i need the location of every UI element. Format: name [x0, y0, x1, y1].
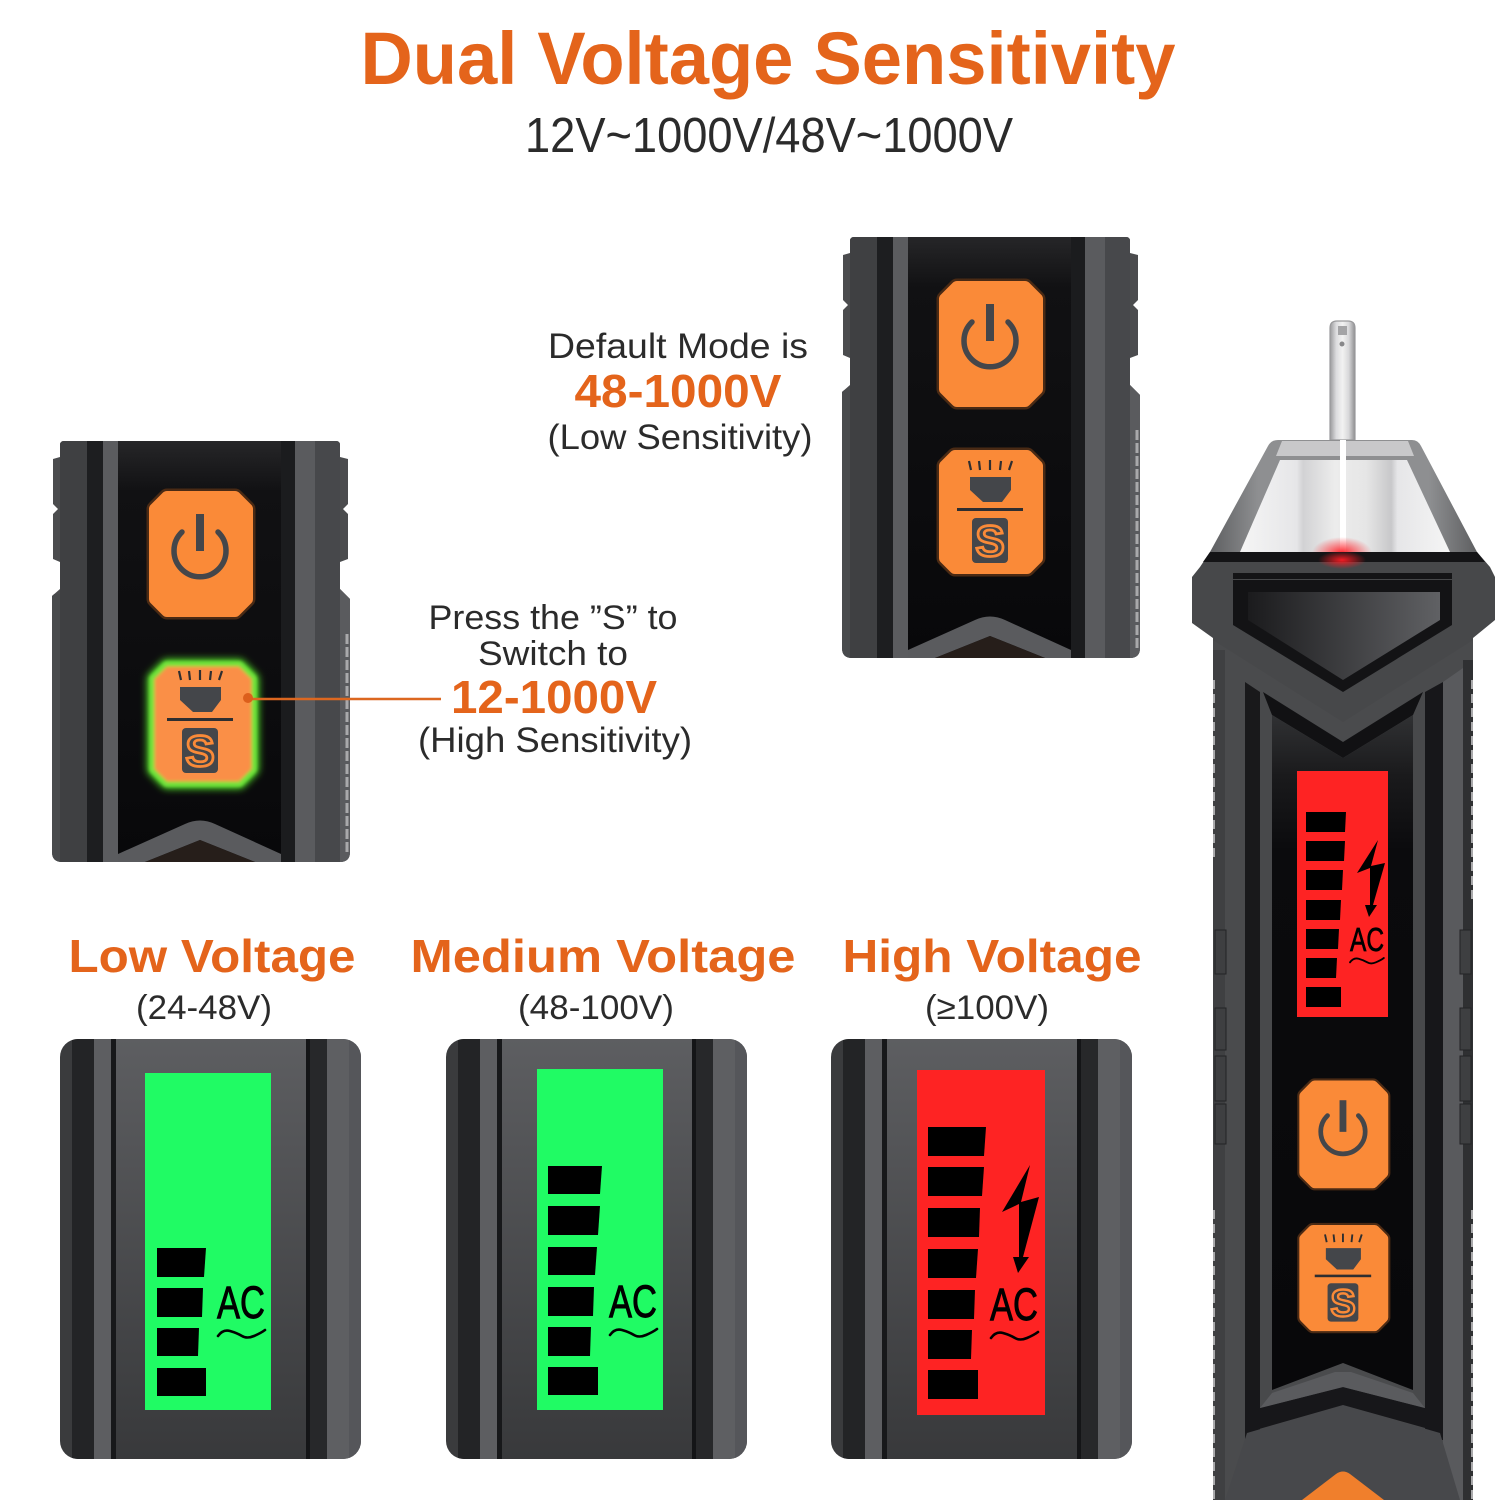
- icon: AC symbol: AC: [990, 1279, 1038, 1330]
- heading: low voltage: Low Voltage: [68, 930, 356, 982]
- icon: lightning bolt: [1002, 1165, 1039, 1273]
- icon: AC symbol: AC: [609, 1276, 657, 1327]
- icon: green glowing S button: S: [185, 727, 215, 776]
- pen buttons: [1304, 1086, 1383, 1326]
- heading: high voltage: [842, 930, 1142, 1027]
- display recess: [1263, 692, 1423, 1390]
- icon: AC symbol: [990, 1279, 1038, 1340]
- heading: high voltage: High Voltage: [842, 930, 1142, 982]
- pen head collar: [1192, 551, 1495, 1500]
- title: Dual Voltage Sensitivity: [360, 17, 1176, 100]
- pen body stripes: [1213, 640, 1473, 1500]
- bar chart: seven level bars: [928, 1127, 986, 1399]
- text block: default mode: [548, 327, 812, 457]
- orange lower tip: [1302, 1472, 1384, 1500]
- heading: medium voltage: (48-100V): [518, 989, 674, 1027]
- heading: high voltage: (≥100V): [925, 989, 1049, 1027]
- icon: green glowing S button: [152, 664, 254, 784]
- callout: leader line to S button: [243, 693, 441, 703]
- panel: high sensitivity tester close-up: [52, 441, 350, 862]
- text block: default mode: (Low Sensitivity): [548, 418, 812, 457]
- heading: low voltage: (24-48V): [136, 989, 272, 1027]
- icon: lightning bolt: [1357, 840, 1385, 917]
- pen buttons: S: [1330, 1283, 1356, 1325]
- text block: press S instruction: 12-1000V: [451, 671, 657, 723]
- bar chart: four level bars: [157, 1248, 206, 1396]
- grip tabs: [1215, 930, 1471, 1144]
- text block: press S instruction: Press the ”S” to: [428, 599, 678, 637]
- panel: low voltage display: [60, 1039, 361, 1459]
- bar chart: seven level bars: [1306, 812, 1346, 1007]
- icon: AC symbol: [1350, 921, 1384, 963]
- bar chart: six level bars: [548, 1166, 602, 1395]
- transparent dome: [1210, 440, 1477, 569]
- text block: press S instruction: Switch to: [478, 635, 628, 673]
- icon: AC symbol: AC: [1350, 921, 1384, 958]
- panel: default mode tester close-up: S: [975, 517, 1005, 566]
- panel: high voltage display: [831, 1039, 1132, 1459]
- heading: medium voltage: Medium Voltage: [410, 930, 796, 982]
- subtitle: voltage ranges: 12V~1000V/48V~1000V: [525, 109, 1013, 163]
- text block: default mode: Default Mode is: [548, 327, 808, 366]
- text block: press S instruction: (High Sensitivity): [418, 721, 692, 760]
- icon: AC symbol: [609, 1276, 657, 1336]
- icon: AC symbol: AC: [217, 1277, 265, 1328]
- text block: default mode: 48-1000V: [574, 365, 782, 417]
- panel: medium voltage display: [446, 1039, 747, 1459]
- probe tip: [1330, 321, 1355, 440]
- printed side markings: [1214, 680, 1472, 1500]
- red LCD: [1297, 771, 1388, 1017]
- panel: full voltage tester pen: [1192, 321, 1495, 1500]
- panel: default mode tester close-up: [842, 237, 1140, 658]
- heading: medium voltage: [410, 930, 796, 1027]
- text block: press S instruction: [418, 599, 692, 760]
- heading: low voltage: [68, 930, 356, 1027]
- lower chevron: [1225, 1372, 1460, 1500]
- icon: AC symbol: [217, 1277, 265, 1338]
